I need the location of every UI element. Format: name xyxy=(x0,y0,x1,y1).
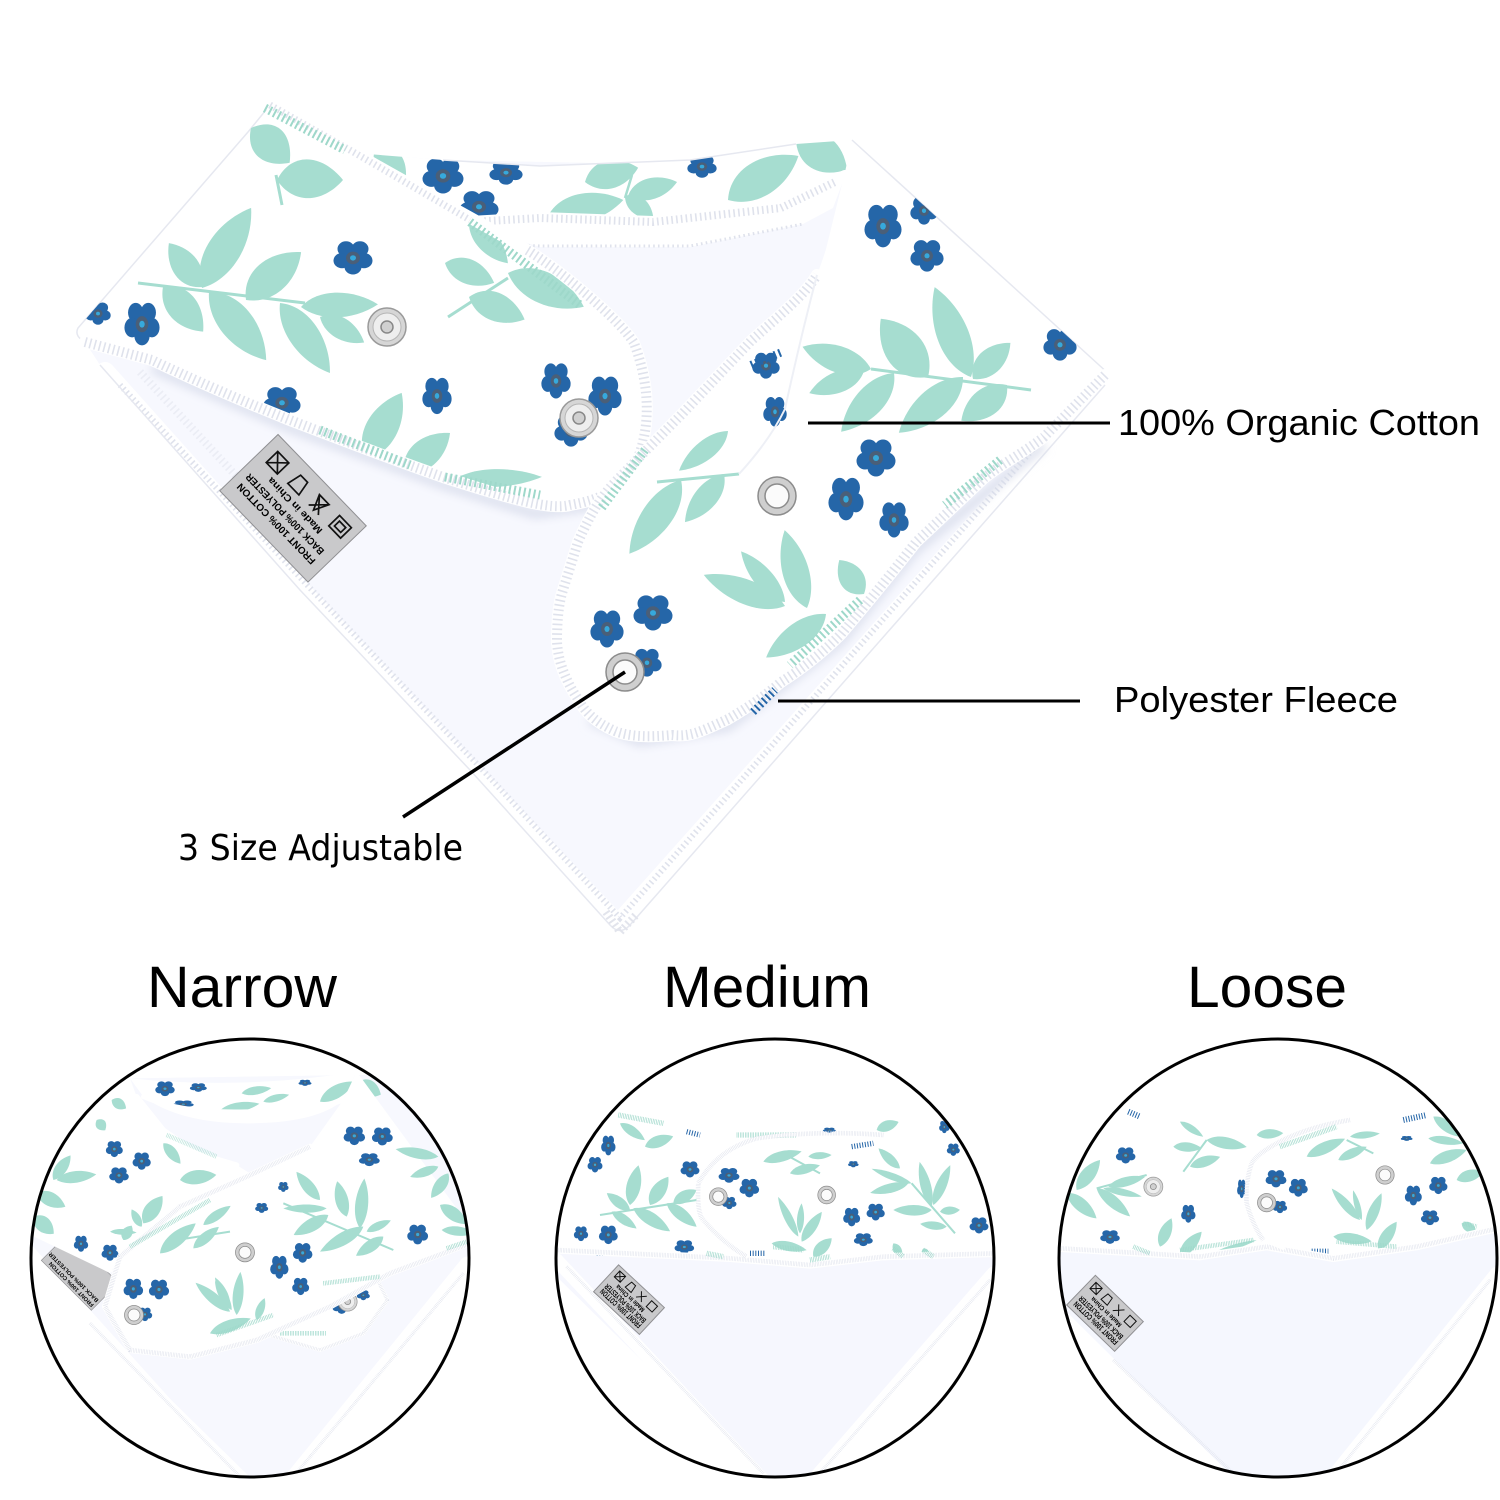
care label behind flap: FRONT 100% COTTON xyxy=(48,1260,96,1307)
right flap narrow xyxy=(114,1080,375,1334)
care label medium: FRONT 100% COTTON xyxy=(598,1287,644,1330)
band loose xyxy=(1082,1228,1484,1254)
bib back fleece xyxy=(85,140,1110,930)
care label loose: FRONT 100% COTTON xyxy=(1072,1299,1120,1346)
left flap shadow xyxy=(152,368,645,514)
right flap xyxy=(557,140,1110,736)
panel: main bib product photo xyxy=(77,105,1110,932)
left flap narrow xyxy=(58,1232,110,1273)
icon: snap button left flap tip xyxy=(560,399,598,437)
inner neck band xyxy=(374,141,846,248)
right flap shadow xyxy=(590,445,1044,742)
callout: 100% Organic Cotton: 100% Organic Cotton xyxy=(1118,402,1480,443)
icon: snap socket mid xyxy=(758,477,796,515)
care label medium xyxy=(594,1265,664,1334)
care label: Made in China xyxy=(265,474,325,536)
care label behind flap xyxy=(41,1246,112,1311)
care label: FRONT 100% COTTON xyxy=(235,481,318,566)
heading: Loose: Loose xyxy=(1187,955,1347,1020)
care label loose xyxy=(1067,1275,1143,1351)
care label medium: BACK 100% POLYESTER xyxy=(603,1282,648,1325)
care label: BACK 100% POLYESTER xyxy=(244,470,327,556)
icon: snap button upper left xyxy=(368,308,406,346)
callout: 3 Size Adjustable: 3 Size Adjustable xyxy=(178,828,463,869)
heading: Medium: Medium xyxy=(663,955,871,1020)
left flap xyxy=(77,105,647,506)
callout: Polyester Fleece: Polyester Fleece xyxy=(1114,679,1398,720)
bottom hem stitching xyxy=(100,365,1105,932)
band medium xyxy=(642,1250,970,1261)
icon: snap socket tip xyxy=(606,653,644,691)
care label medium: Made in China xyxy=(615,1283,646,1313)
callout: 3 Size Adjustable xyxy=(178,672,625,869)
panel: narrow fit circle xyxy=(29,1039,475,1480)
care label xyxy=(220,434,366,582)
panel: medium fit circle xyxy=(553,1039,997,1480)
panel: loose fit circle xyxy=(1057,1039,1500,1480)
heading: Narrow: Narrow xyxy=(147,955,338,1020)
small tab narrow xyxy=(263,1278,387,1350)
care label loose: Made in China xyxy=(1090,1295,1124,1328)
care label loose: BACK 100% POLYESTER xyxy=(1077,1294,1125,1341)
care label behind flap: BACK 100% POLYESTER xyxy=(48,1251,100,1303)
